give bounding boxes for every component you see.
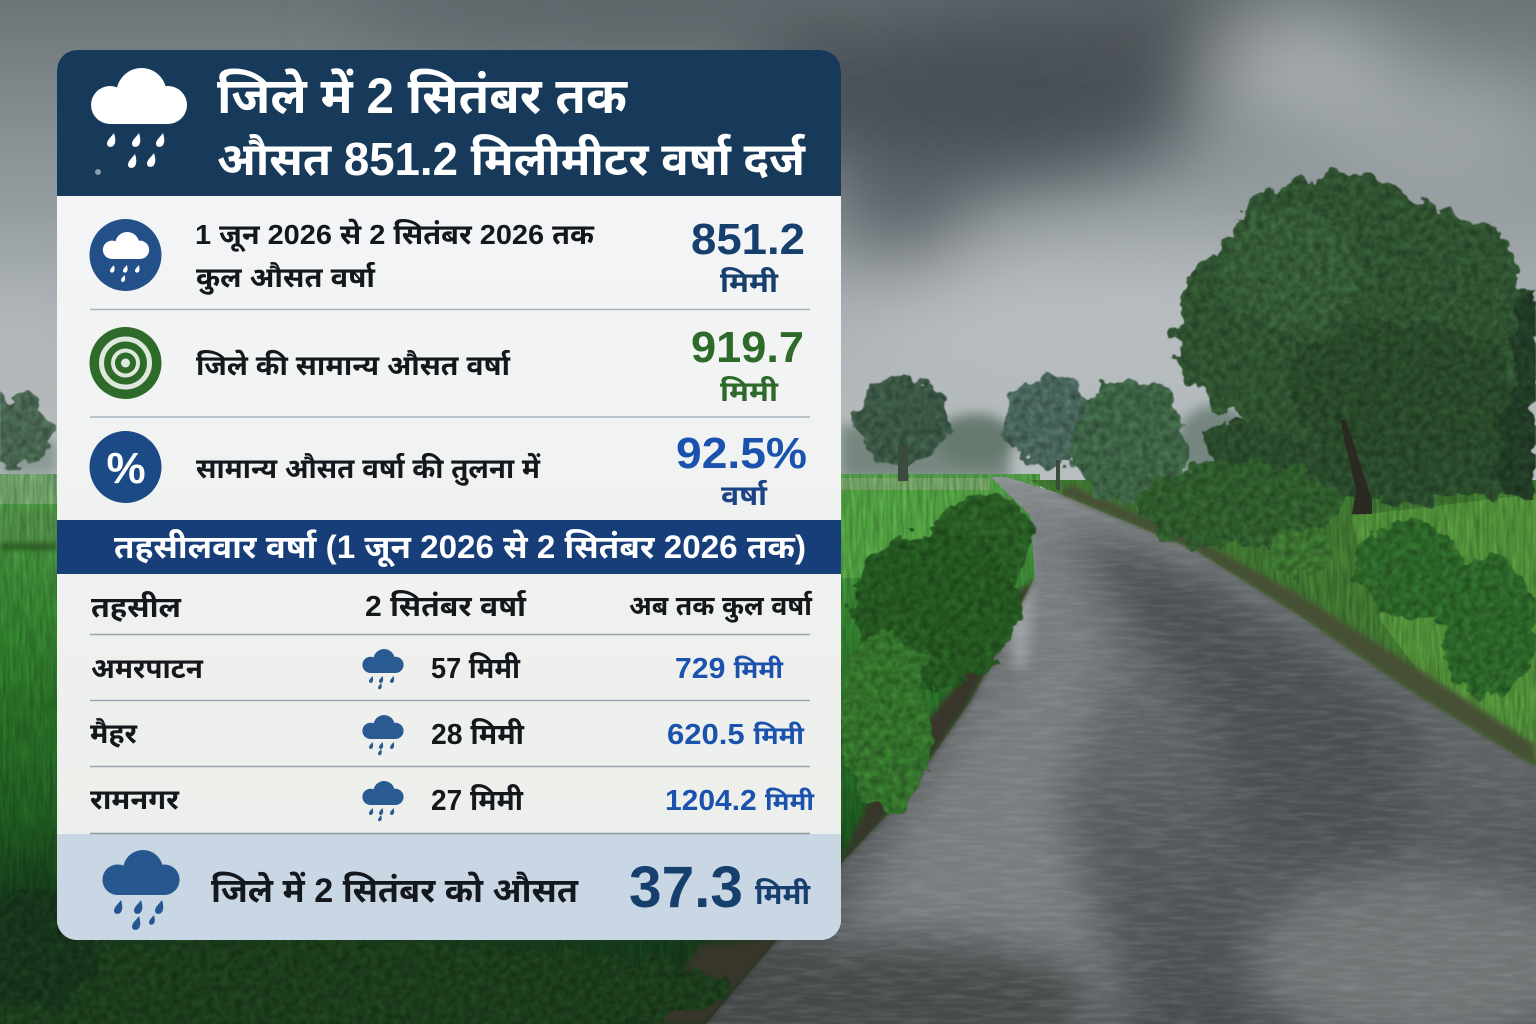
icon: green target <box>90 327 162 399</box>
row: Maihar: मैहर <box>90 717 138 749</box>
table header: 2 सितंबर वर्षा <box>365 590 527 623</box>
icon: percent circle: % <box>106 444 146 493</box>
distant hazy treeline <box>0 405 1255 485</box>
stat row: total rainfall: 851.2 <box>691 215 805 264</box>
icon: blue rain cloud <box>102 850 180 930</box>
stat row: total rainfall: मिमी <box>720 266 779 298</box>
icon: small rain cloud <box>362 781 404 821</box>
table header <box>91 590 813 624</box>
stat row: percent of normal <box>90 429 807 511</box>
fields <box>0 474 1536 1024</box>
table <box>90 590 815 821</box>
roadside right bushes <box>1135 461 1345 549</box>
stat row: normal average: 919.7 <box>691 323 804 372</box>
info panel <box>57 50 841 940</box>
icon: white rain cloud <box>91 68 187 175</box>
title: औसत 851.2 मिलीमीटर वर्षा दर्ज <box>217 133 806 185</box>
row: Maihar <box>90 715 805 755</box>
mid trees <box>857 376 949 464</box>
table header: तहसील <box>91 591 182 624</box>
sky and storm clouds <box>0 0 1536 520</box>
stat row: percent of normal: सामान्य औसत वर्षा की तुलना में <box>196 452 541 486</box>
row: Ramnagar <box>90 781 815 821</box>
stat row: normal average: जिले की सामान्य औसत वर्षा <box>196 348 511 381</box>
footer band: district average on 2 September: जिले में 2 सितंबर को औसत <box>211 871 579 910</box>
header band <box>57 50 841 196</box>
row: Amarpatan: 729 मिमी <box>675 653 784 685</box>
big tree understory <box>1205 290 1536 505</box>
row: Maihar: 620.5 मिमी <box>667 719 805 751</box>
row: Amarpatan <box>91 649 784 689</box>
stat row: normal average: मिमी <box>720 375 779 407</box>
row: Ramnagar: 27 मिमी <box>431 784 523 817</box>
big tree crown <box>1172 170 1518 450</box>
row: Maihar: 28 मिमी <box>431 718 524 751</box>
section band: tehsil rainfall <box>57 520 841 574</box>
footer band: district average on 2 September: मिमी <box>755 878 810 911</box>
footer band: district average on 2 September <box>57 834 841 940</box>
stat row: total rainfall: 1 जून 2026 से 2 सितंबर 2026 तक <box>195 217 595 252</box>
stat row: total rainfall <box>90 215 805 298</box>
section band: tehsil rainfall: तहसीलवार वर्षा (1 जून 2026 से 2 सितंबर 2026 तक) <box>114 529 806 567</box>
road side earth <box>650 577 1035 1024</box>
stat row: normal average <box>90 327 802 401</box>
icon: small rain cloud <box>362 649 404 689</box>
roadside left bushes <box>937 496 1033 584</box>
table header: अब तक कुल वर्षा <box>629 590 813 622</box>
stat row: total rainfall: कुल औसत वर्षा <box>196 261 376 295</box>
row: Ramnagar: रामनगर <box>90 784 180 815</box>
footer band: district average on 2 September: 37.3 <box>629 855 743 920</box>
title <box>217 68 806 185</box>
row: Ramnagar: 1204.2 मिमी <box>665 785 815 817</box>
row: Amarpatan: अमरपाटन <box>91 653 204 684</box>
stat row: percent of normal: वर्षा <box>721 479 768 511</box>
icon: small rain cloud <box>362 715 404 755</box>
icon: percent circle <box>90 431 162 503</box>
icon: blue circle rain cloud <box>90 219 162 291</box>
tree trunks <box>898 420 1372 514</box>
road <box>660 470 1536 1024</box>
title: जिले में 2 सितंबर तक <box>217 68 628 124</box>
row: Amarpatan: 57 मिमी <box>431 652 520 685</box>
stat row: percent of normal: 92.5% <box>676 429 807 478</box>
foreground shrubs <box>0 940 730 1024</box>
